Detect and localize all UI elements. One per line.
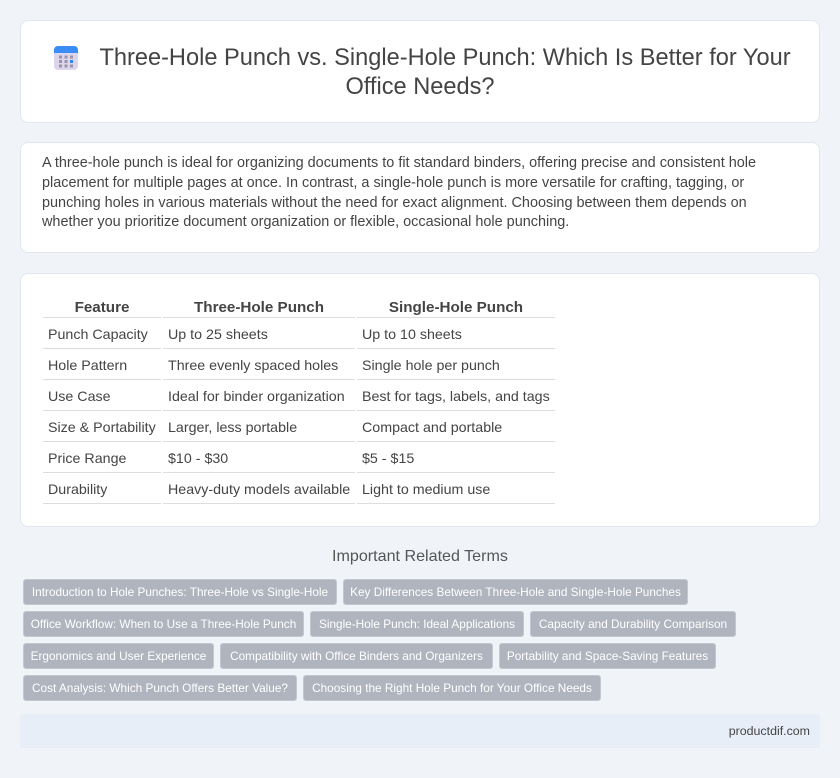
table: Use Case bbox=[48, 389, 111, 405]
table: Heavy-duty models available bbox=[168, 482, 350, 498]
tag bbox=[499, 643, 716, 669]
footer bar bbox=[20, 714, 820, 748]
title: Office Needs? bbox=[345, 74, 495, 100]
table: Size & Portability bbox=[48, 420, 156, 436]
table: Best for tags, labels, and tags bbox=[362, 389, 550, 405]
tag: Capacity and Durability Comparison bbox=[539, 617, 727, 631]
table: Larger, less portable bbox=[168, 420, 297, 436]
tag bbox=[23, 579, 337, 605]
tag: Choosing the Right Hole Punch for Your Office Needs bbox=[312, 681, 592, 695]
table header: three-hole punch: Three-Hole Punch bbox=[194, 299, 324, 316]
text block: description: placement for multiple pages at once. In contrast, a single-hole punch is more versatile for crafting, tagging, or bbox=[42, 175, 744, 191]
text block: description: A three-hole punch is ideal for organizing documents to fit standard binders, offering precise and consistent hole bbox=[42, 155, 756, 171]
text block: description: whether you prioritize document organization or flexible, occasional hole punching. bbox=[42, 214, 569, 230]
title: Three-Hole Punch vs. Single-Hole Punch: Which Is Better for Your bbox=[99, 45, 791, 71]
tag: Single-Hole Punch: Ideal Applications bbox=[319, 617, 515, 631]
tag: Compatibility with Office Binders and Organizers bbox=[230, 649, 483, 663]
table: $5 - $15 bbox=[362, 451, 414, 467]
tag: Portability and Space-Saving Features bbox=[507, 649, 708, 663]
text block: description: punching holes in various materials without the need for exact alignment. Choosing between them depends on bbox=[42, 195, 747, 211]
tag: Office Workflow: When to Use a Three-Hole Punch bbox=[31, 617, 296, 631]
table: Three evenly spaced holes bbox=[168, 358, 338, 374]
heading: important related terms: Important Related Terms bbox=[332, 547, 508, 565]
table: Ideal for binder organization bbox=[168, 389, 345, 405]
tag: Cost Analysis: Which Punch Offers Better Value? bbox=[32, 681, 288, 695]
tag bbox=[23, 675, 297, 701]
related term tags bbox=[23, 579, 736, 701]
tag bbox=[23, 643, 214, 669]
tag bbox=[23, 611, 304, 637]
tag bbox=[220, 643, 493, 669]
title bbox=[99, 45, 791, 100]
table: Compact and portable bbox=[362, 420, 502, 436]
table: Single hole per punch bbox=[362, 358, 500, 374]
text block: description bbox=[42, 155, 756, 230]
tag bbox=[343, 579, 688, 605]
table: Up to 10 sheets bbox=[362, 327, 462, 343]
table: Light to medium use bbox=[362, 482, 490, 498]
tag: Introduction to Hole Punches: Three-Hole vs Single-Hole bbox=[32, 585, 328, 599]
tag: Key Differences Between Three-Hole and Single-Hole Punches bbox=[350, 585, 681, 599]
panel: description bbox=[20, 142, 820, 253]
footer source text: productdif.com bbox=[729, 724, 810, 738]
tag bbox=[303, 675, 601, 701]
tag: Ergonomics and User Experience bbox=[31, 649, 206, 663]
table: Hole Pattern bbox=[48, 358, 127, 374]
tag bbox=[530, 611, 736, 637]
panel: comparison table bbox=[20, 273, 820, 527]
table: Durability bbox=[48, 482, 107, 498]
panel: header bbox=[20, 20, 820, 123]
table header: single-hole punch: Single-Hole Punch bbox=[389, 299, 523, 316]
tag bbox=[310, 611, 524, 637]
icon: calendar bbox=[54, 46, 78, 70]
table: $10 - $30 bbox=[168, 451, 228, 467]
table bbox=[43, 299, 555, 504]
table header: feature: Feature bbox=[75, 299, 129, 316]
table: Price Range bbox=[48, 451, 126, 467]
table: Up to 25 sheets bbox=[168, 327, 268, 343]
table: Punch Capacity bbox=[48, 327, 148, 343]
